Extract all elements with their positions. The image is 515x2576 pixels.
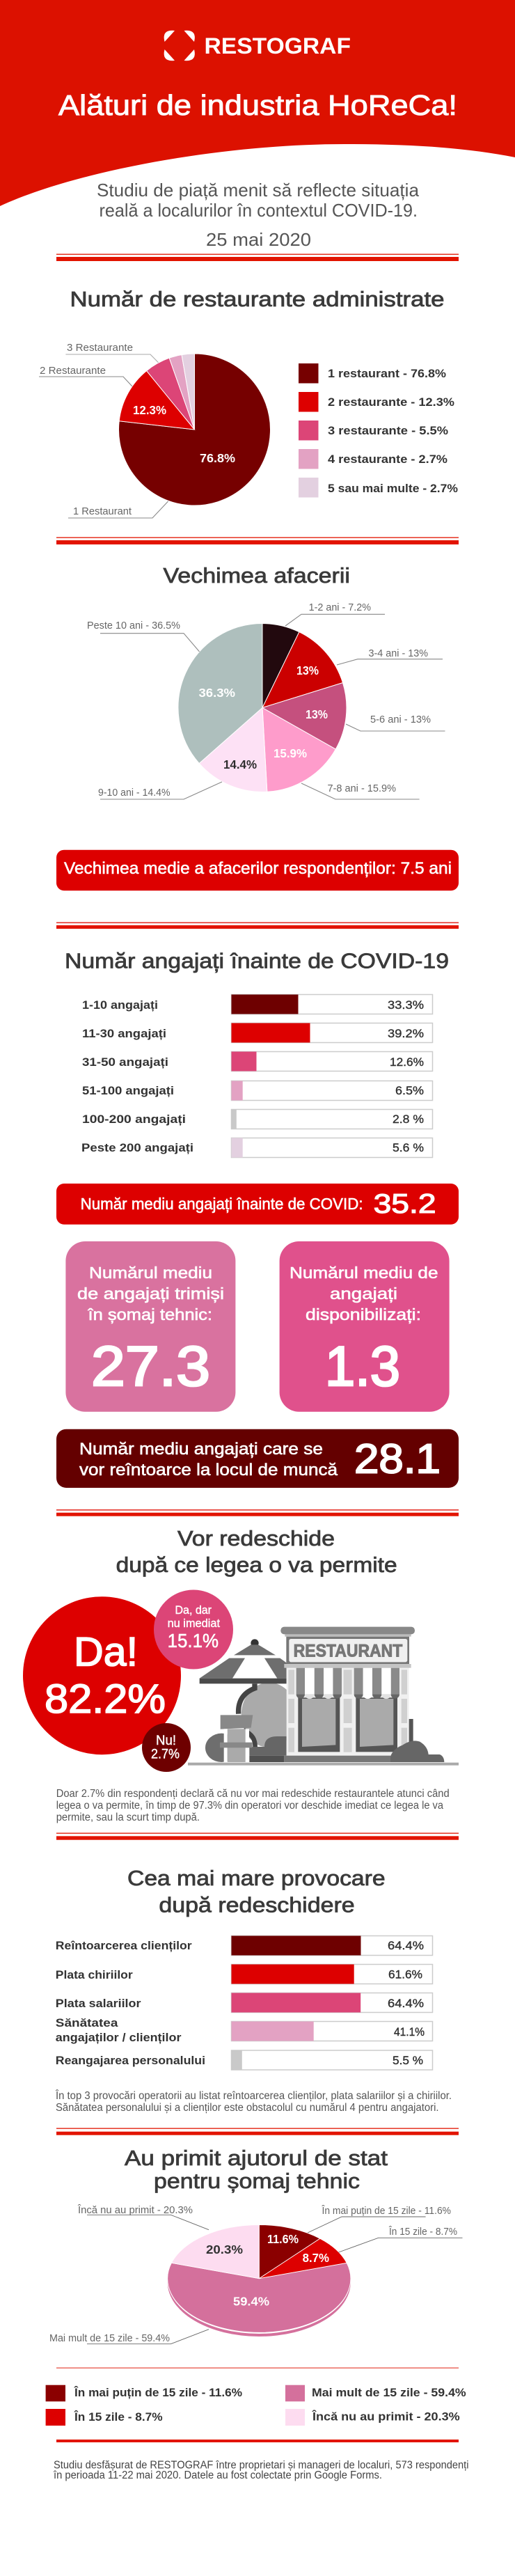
callout: employees returning xyxy=(56,1429,459,1488)
callout labels: Peste 10 ani - 36.5% xyxy=(87,620,180,631)
heading: biggest challenge: Cea mai mare provocare xyxy=(127,1867,386,1890)
stat card: technical unemployment: de angajați trimiși xyxy=(77,1285,224,1303)
subtitle xyxy=(97,180,420,250)
bar chart: challenges: Reangajarea personalului xyxy=(56,2055,205,2067)
callout labels: În mai puțin de 15 zile - 11.6% xyxy=(322,2205,451,2217)
callout: average employees before COVID: Număr mediu angajați înainte de COVID: xyxy=(81,1195,363,1213)
paragraph: challenges note: Sănătatea personalului și a clienților este obstacolul cu numărul 4 pentru angajatori. xyxy=(56,2102,438,2114)
bar chart: employees: 5.6 % xyxy=(393,1141,424,1154)
heading: state aid xyxy=(125,2146,388,2193)
paragraph: reopening note: permite, sau la scurt timp după. xyxy=(56,1812,200,1823)
pie value labels xyxy=(206,2232,329,2309)
pie value labels: 13% xyxy=(306,707,328,721)
pie value labels: 13% xyxy=(296,663,319,677)
stat card: laid off: Numărul mediu de xyxy=(290,1264,438,1282)
circle: yes 82.2%: Da! xyxy=(74,1630,138,1675)
callout labels: 9-10 ani - 14.4% xyxy=(98,787,171,799)
pie chart: restaurants xyxy=(119,354,271,505)
pie callouts xyxy=(100,614,445,799)
stat card: laid off: disponibilizați: xyxy=(306,1305,421,1324)
pie value labels: 20.3% xyxy=(206,2243,243,2256)
stat card: technical unemployment: Numărul mediu xyxy=(89,1264,212,1282)
logo xyxy=(164,31,351,61)
bar chart: challenges: Sănătatea xyxy=(56,2017,118,2029)
pie callouts xyxy=(39,354,168,518)
legend: state aid xyxy=(46,2385,466,2426)
circle: yes but not immediately 15.1% xyxy=(154,1590,233,1670)
callout labels xyxy=(87,602,431,799)
circle: no 2.7%: 2.7% xyxy=(151,1748,180,1762)
circle: yes but not immediately 15.1%: 15.1% xyxy=(168,1630,219,1651)
subtitle: reală a localurilor în contextul COVID-19. xyxy=(99,200,418,221)
subtitle: 25 mai 2020 xyxy=(206,229,311,250)
bar chart: employees xyxy=(81,994,433,1157)
callout: average business age xyxy=(56,850,459,890)
header banner xyxy=(0,0,515,206)
stat card: technical unemployment: în șomaj tehnic: xyxy=(87,1305,212,1324)
callout labels xyxy=(49,2204,457,2344)
callout labels: 7-8 ani - 15.9% xyxy=(327,783,396,794)
bar chart: employees: 100-200 angajați xyxy=(82,1113,186,1126)
circle: yes but not immediately 15.1%: nu imediat xyxy=(168,1617,220,1630)
bar chart: employees: 6.5% xyxy=(395,1084,424,1097)
bar chart: challenges xyxy=(56,1935,433,2070)
callout: employees returning: Număr mediu angajați care se xyxy=(79,1440,323,1459)
pie chart: business age xyxy=(178,624,347,792)
heading: biggest challenge xyxy=(127,1867,386,1917)
bar chart: employees: 31-50 angajați xyxy=(82,1056,168,1069)
icon: logo crescents xyxy=(164,31,195,61)
stat card: technical unemployment xyxy=(65,1241,235,1412)
callout labels: Mai mult de 15 zile - 59.4% xyxy=(49,2333,170,2344)
pie value labels: 15.9% xyxy=(274,746,307,760)
paragraph: challenges note: În top 3 provocări operatorii au listat reîntoarcerea clienților, plata salariilor și a chiriilor. xyxy=(55,2090,452,2102)
legend: 4 restaurante - 2.7% xyxy=(328,453,447,466)
callout: employees returning: vor reîntoarce la locul de muncă xyxy=(79,1461,338,1479)
bar chart: challenges: 64.4% xyxy=(388,1939,424,1952)
subtitle: Studiu de piață menit să reflecte situația xyxy=(97,180,420,201)
legend: state aid: În mai puțin de 15 zile - 11.6% xyxy=(74,2386,242,2399)
callout labels: 3 Restaurante xyxy=(67,343,133,354)
pie value labels xyxy=(199,663,328,771)
heading: state aid: pentru șomaj tehnic xyxy=(154,2169,360,2193)
bar chart: employees: 39.2% xyxy=(388,1027,424,1040)
bar chart: employees: 51-100 angajați xyxy=(82,1085,174,1097)
stat card: technical unemployment: 27.3 xyxy=(91,1335,210,1398)
callout: employees returning: 28.1 xyxy=(354,1436,441,1482)
callout labels: În 15 zile - 8.7% xyxy=(388,2226,457,2238)
legend: state aid: Încă nu au primit - 20.3% xyxy=(312,2410,460,2424)
legend xyxy=(299,363,458,497)
paragraph: reopening note xyxy=(56,1788,450,1823)
circle: yes 82.2%: 82.2% xyxy=(45,1676,166,1722)
title: Alături de industria HoReCa! xyxy=(58,89,457,121)
bar chart: employees: 33.3% xyxy=(388,998,424,1012)
panel: restaurants managed xyxy=(39,288,458,518)
footer note: Studiu desfășurat de RESTOGRAF între proprietari și manageri de localuri, 573 respondenți xyxy=(54,2460,469,2472)
callout labels xyxy=(40,343,133,517)
pie callouts xyxy=(87,2215,462,2344)
bar chart: employees: 12.6% xyxy=(390,1055,424,1069)
heading: biggest challenge: după redeschidere xyxy=(159,1894,355,1917)
logo wordmark: RESTOGRAF xyxy=(205,33,351,58)
bar chart: employees: 2.8 % xyxy=(393,1113,424,1126)
illustration: restaurant storefront: RESTAURANT xyxy=(294,1642,403,1661)
legend: 5 sau mai multe - 2.7% xyxy=(328,482,458,495)
pie value labels: 76.8% xyxy=(200,451,235,465)
heading: state aid: Au primit ajutorul de stat xyxy=(125,2146,388,2170)
pie value labels: 36.3% xyxy=(199,686,235,700)
bar chart: challenges: Plata salariilor xyxy=(56,1997,141,2010)
pie value labels: 8.7% xyxy=(303,2251,329,2265)
panel: state aid xyxy=(49,2146,462,2344)
pie value labels: 11.6% xyxy=(267,2232,299,2246)
heading: restaurants managed: Număr de restaurante administrate xyxy=(70,288,444,311)
illustration: restaurant storefront xyxy=(188,1627,459,1766)
bar chart: challenges: 41.1% xyxy=(394,2025,425,2039)
bar chart: challenges: angajaților / clienților xyxy=(56,2032,182,2044)
stat card: laid off: angajați xyxy=(330,1285,397,1303)
bar chart: challenges: 5.5 % xyxy=(393,2054,423,2067)
pie value labels: 12.3% xyxy=(133,403,166,417)
legend: 3 restaurante - 5.5% xyxy=(328,425,448,437)
panel: biggest challenge xyxy=(55,1867,452,2114)
panel: business age xyxy=(87,564,445,799)
heading: business age: Vechimea afacerii xyxy=(163,564,350,588)
footer note: în perioada 11-22 mai 2020. Datele au fost colectate prin Google Forms. xyxy=(53,2469,382,2481)
bar chart: challenges: Reîntoarcerea clienților xyxy=(56,1940,192,1952)
circle: no 2.7%: Nu! xyxy=(156,1734,176,1748)
stat card: laid off: 1.3 xyxy=(325,1335,400,1398)
callout labels: Încă nu au primit - 20.3% xyxy=(77,2204,193,2216)
heading: will reopen: Vor redeschide xyxy=(177,1527,335,1550)
bar chart: challenges: Plata chiriilor xyxy=(56,1969,133,1981)
pie value labels xyxy=(133,403,235,465)
callout: average employees before COVID: 35.2 xyxy=(374,1189,436,1219)
bar chart: challenges: 61.6% xyxy=(388,1968,422,1981)
circle: yes 82.2% xyxy=(23,1596,181,1754)
callout labels: 1 Restaurant xyxy=(73,506,132,517)
callout labels: 5-6 ani - 13% xyxy=(370,714,431,725)
pie value labels: 59.4% xyxy=(233,2295,269,2309)
heading: will reopen: după ce legea o va permite xyxy=(116,1553,397,1577)
circle: yes but not immediately 15.1%: Da, dar xyxy=(175,1604,212,1617)
footer note xyxy=(53,2460,468,2481)
pie chart: state aid xyxy=(168,2225,351,2337)
paragraph: challenges note xyxy=(55,2090,452,2114)
callout labels: 1-2 ani - 7.2% xyxy=(309,602,371,613)
callout labels: 2 Restaurante xyxy=(40,366,106,377)
callout: average business age: Vechimea medie a afacerilor respondenților: 7.5 ani xyxy=(64,859,452,878)
heading: employees before COVID: Număr angajați înainte de COVID-19 xyxy=(65,950,449,973)
bar chart: employees: 1-10 angajați xyxy=(82,999,158,1012)
legend: state aid: Mai mult de 15 zile - 59.4% xyxy=(312,2387,466,2399)
panel: employees before COVID xyxy=(65,950,449,1157)
circle: no 2.7% xyxy=(142,1723,191,1772)
paragraph: reopening note: Doar 2.7% din respondenți declară că nu vor mai redeschide restaurantele atunci când xyxy=(56,1788,450,1800)
heading: will reopen xyxy=(116,1527,397,1577)
bar chart: challenges: 64.4% xyxy=(388,1997,424,2010)
legend: 2 restaurante - 12.3% xyxy=(328,396,454,409)
bar chart: employees: 11-30 angajați xyxy=(82,1028,166,1040)
panel: will reopen xyxy=(23,1527,459,1823)
bar chart: employees: Peste 200 angajați xyxy=(81,1142,193,1154)
legend: 1 restaurant - 76.8% xyxy=(328,368,446,380)
paragraph: reopening note: legea o va permite, în timp de 97.3% din operatori vor deschide imediat ce legea le va xyxy=(56,1800,443,1812)
callout labels: 3-4 ani - 13% xyxy=(369,648,428,659)
stat card: laid off xyxy=(280,1241,450,1412)
pie value labels: 14.4% xyxy=(223,757,257,771)
callout: average employees before COVID xyxy=(56,1184,459,1225)
legend: state aid: În 15 zile - 8.7% xyxy=(74,2410,163,2424)
